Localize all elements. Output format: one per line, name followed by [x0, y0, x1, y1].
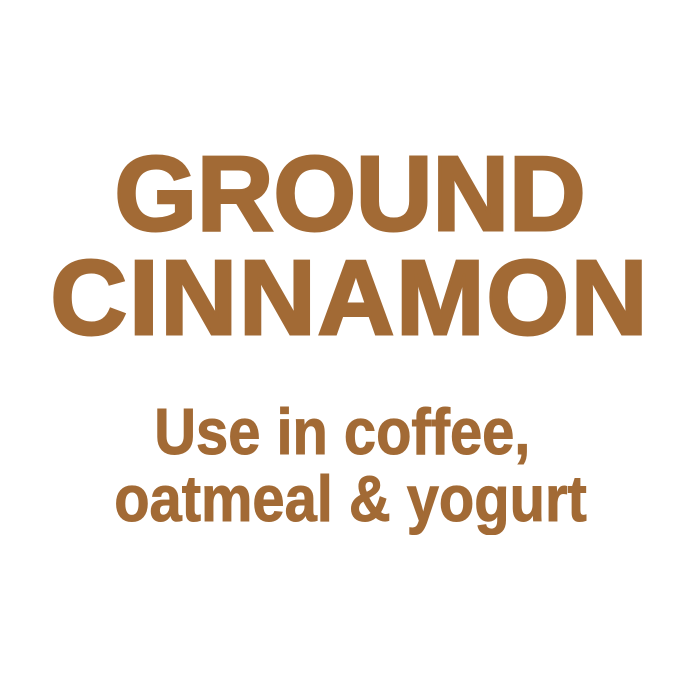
subtitle line 2: oatmeal & yogurt [114, 462, 586, 535]
subtitle line 1: Use in coffee, [154, 395, 530, 468]
subtitle [114, 395, 586, 535]
title line 1: GROUND [114, 135, 586, 253]
title [51, 135, 649, 357]
title line 2: CINNAMON [51, 239, 649, 357]
